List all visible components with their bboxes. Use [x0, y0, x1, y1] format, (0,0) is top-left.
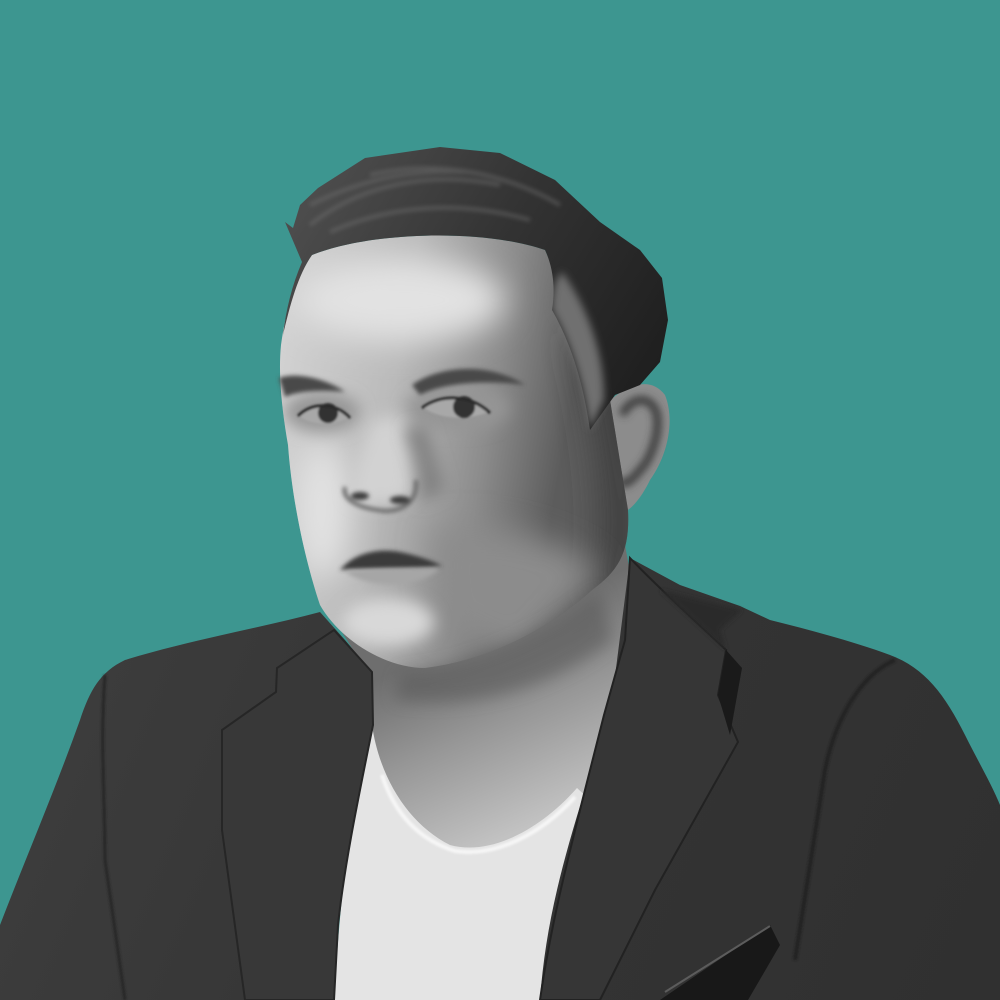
cheek highlight [294, 440, 350, 580]
eye socket shadows [284, 392, 360, 432]
hair grey side [552, 272, 604, 430]
right eye [422, 396, 490, 418]
face [280, 235, 640, 668]
forehead highlight [295, 258, 505, 342]
left eye [298, 403, 350, 424]
sleeve seams [103, 675, 125, 1000]
nose side shadow [405, 425, 445, 503]
chin highlight [342, 598, 434, 646]
collar shadow [660, 590, 742, 650]
pocket [660, 925, 780, 1000]
right lapel [540, 558, 738, 1000]
left lapel [222, 630, 373, 1000]
stubble shading [470, 524, 607, 650]
jacket right side [540, 558, 1000, 1000]
hair strands [310, 168, 560, 232]
t-shirt [334, 725, 590, 1000]
left eyebrow [279, 376, 345, 397]
neck [325, 490, 635, 1000]
jaw shadow on neck [395, 590, 612, 702]
hair [283, 147, 668, 430]
lapel notch shadow [718, 650, 742, 735]
nose highlight [350, 415, 412, 504]
side shadow near ear [570, 364, 628, 587]
nose [345, 480, 416, 511]
ear [599, 384, 670, 514]
jacket [0, 558, 1000, 1000]
mouth [340, 551, 442, 584]
right eyebrow [412, 369, 525, 395]
jacket left side [0, 612, 372, 1000]
